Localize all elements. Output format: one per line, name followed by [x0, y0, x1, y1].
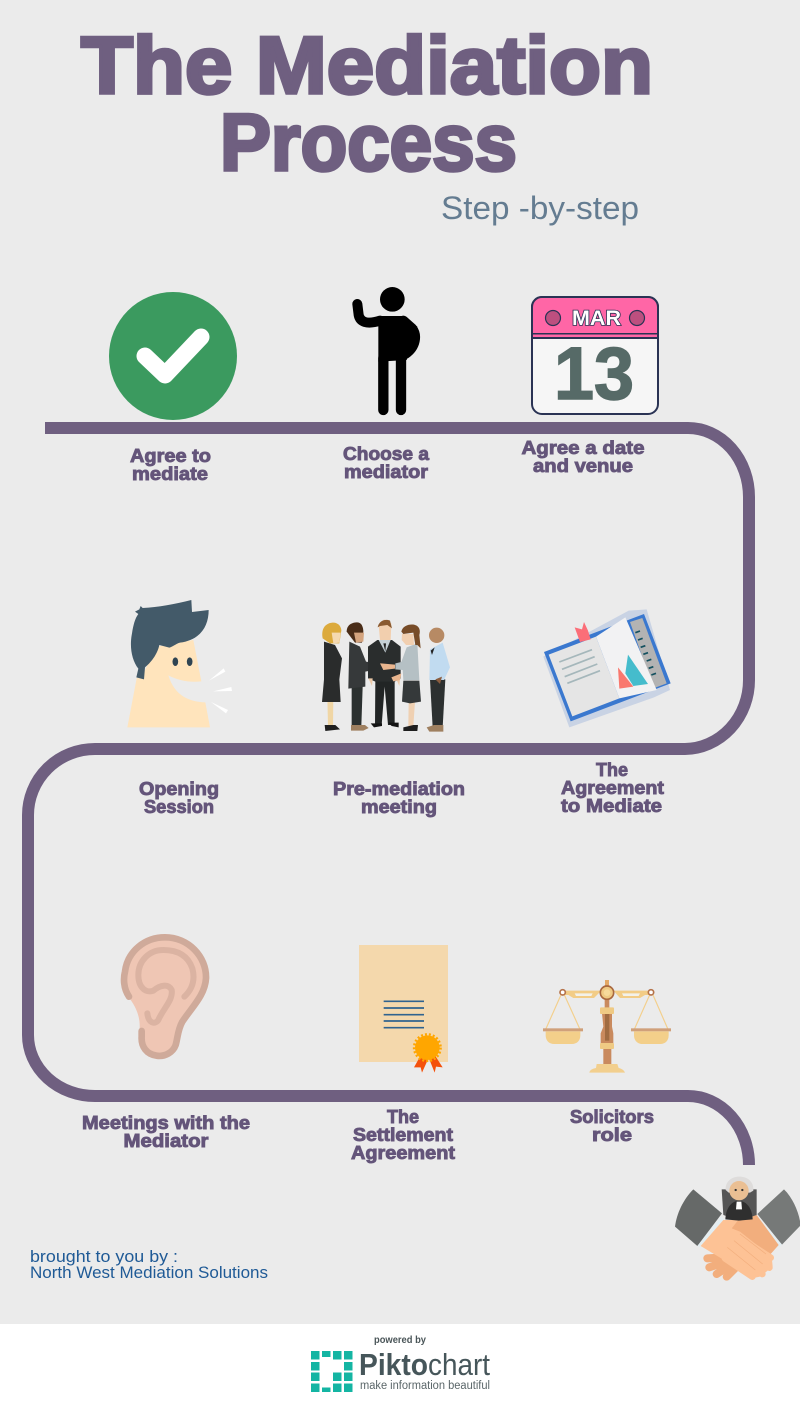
- icon: calendar 13 March: 13: [554, 332, 634, 415]
- label: the settlement agreement: Settlement: [353, 1124, 453, 1145]
- credit text: [30, 1248, 268, 1282]
- footer: powered by Piktochart: chart: [428, 1347, 490, 1382]
- woman right: [408, 702, 415, 726]
- label: agree to mediate: Agree to: [130, 445, 211, 466]
- label: choose a mediator: mediator: [344, 461, 428, 482]
- label: solicitors role: role: [592, 1124, 632, 1145]
- icon: green check mark: [109, 292, 237, 420]
- label: agree to mediate: mediate: [132, 463, 208, 484]
- subtitle: Step -by-step: [441, 190, 639, 226]
- man 2: [352, 687, 363, 726]
- label: pre-mediation meeting: Pre-mediation: [333, 778, 465, 799]
- label: solicitors role: Solicitors: [570, 1106, 654, 1127]
- label: the settlement agreement: Agreement: [351, 1142, 455, 1163]
- icon: scales of justice: [543, 980, 671, 1073]
- winding process path: [28, 428, 749, 1165]
- title: [81, 21, 653, 188]
- icon: standing mediator: [357, 287, 417, 410]
- label: meetings with the mediator: Meetings with the: [82, 1112, 250, 1133]
- icon: calendar 13 March: MAR: [572, 307, 621, 330]
- title: Process: [220, 98, 517, 188]
- label: agree a date and venue: [522, 437, 644, 476]
- label: meetings with the mediator: Mediator: [124, 1130, 208, 1151]
- label: opening session: Session: [144, 796, 214, 817]
- woman left: [327, 697, 333, 726]
- label: the agreement to mediate: [561, 759, 664, 816]
- label: choose a mediator: [343, 443, 430, 482]
- icon: Piktochart logo: [311, 1351, 352, 1392]
- label: the settlement agreement: The: [387, 1106, 419, 1127]
- credit text: North West Mediation Solutions: [30, 1264, 268, 1282]
- man centre: [375, 680, 395, 725]
- label: the agreement to mediate: Agreement: [561, 777, 664, 798]
- title: The Mediation: [81, 21, 653, 111]
- label: choose a mediator: Choose a: [343, 443, 430, 464]
- icon: group of business people: [322, 619, 450, 732]
- icon: speaking face: [127, 600, 232, 727]
- label: pre-mediation meeting: meeting: [361, 796, 437, 817]
- label: agree to mediate: [130, 445, 211, 484]
- credit text: brought to you by :: [30, 1248, 178, 1266]
- label: the settlement agreement: [351, 1106, 455, 1163]
- footer: powered by Piktochart: make information beautiful: [360, 1380, 490, 1392]
- label: solicitors role: [570, 1106, 654, 1145]
- icon: open agreement booklet: [543, 609, 671, 727]
- hands: [380, 663, 395, 670]
- footer: powered by Piktochart: Pikto: [359, 1347, 428, 1382]
- label: pre-mediation meeting: [333, 778, 465, 817]
- label: the agreement to mediate: to Mediate: [561, 795, 662, 816]
- label: agree a date and venue: Agree a date: [522, 437, 644, 458]
- label: agree a date and venue: and venue: [533, 455, 633, 476]
- label: opening session: Opening: [139, 778, 219, 799]
- man right: [430, 679, 445, 727]
- icon: settlement certificate: [359, 945, 448, 1073]
- icon: calendar 13 March: [532, 297, 658, 415]
- label: opening session: [139, 778, 219, 817]
- footer: powered by Piktochart: powered by: [374, 1335, 426, 1346]
- icon: ear: [122, 934, 209, 1059]
- label: the agreement to mediate: The: [596, 759, 628, 780]
- footer: powered by Piktochart: [0, 1324, 800, 1404]
- icon: handshake with judge: [675, 1177, 800, 1278]
- label: meetings with the mediator: [82, 1112, 250, 1151]
